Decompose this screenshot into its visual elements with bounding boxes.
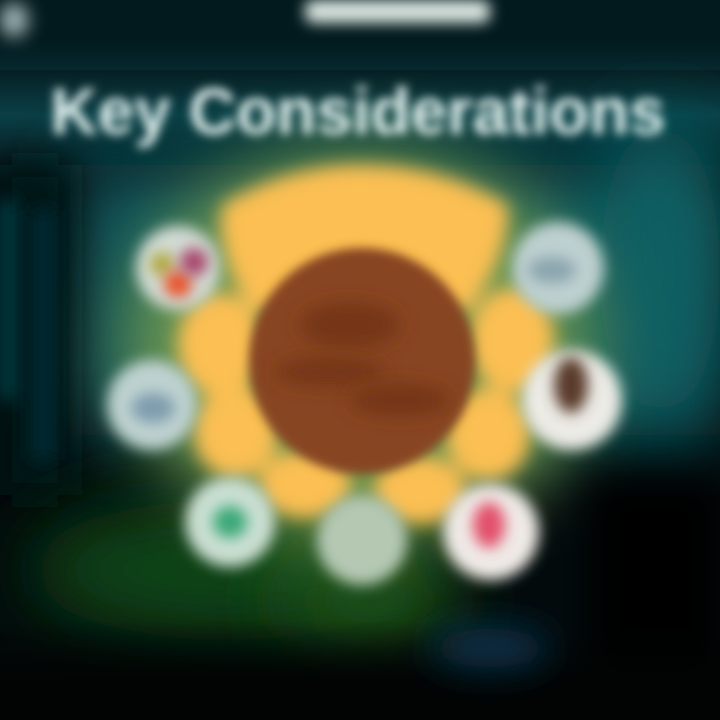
icon: red symbol	[443, 484, 539, 580]
icon: colourful chart	[136, 226, 220, 310]
title: Key Considerations	[50, 74, 666, 148]
icon: brown figure	[522, 350, 622, 450]
top left corner mark	[0, 3, 28, 37]
flower centre	[249, 248, 475, 474]
icon: green symbol	[185, 477, 275, 567]
icon: grey document	[512, 222, 604, 314]
top white pill	[305, 0, 490, 23]
sunflower petals	[178, 165, 554, 524]
sunflower diagram	[107, 165, 622, 585]
icon: pale green circle	[317, 495, 407, 585]
icon: grey-blue badge	[107, 360, 197, 450]
